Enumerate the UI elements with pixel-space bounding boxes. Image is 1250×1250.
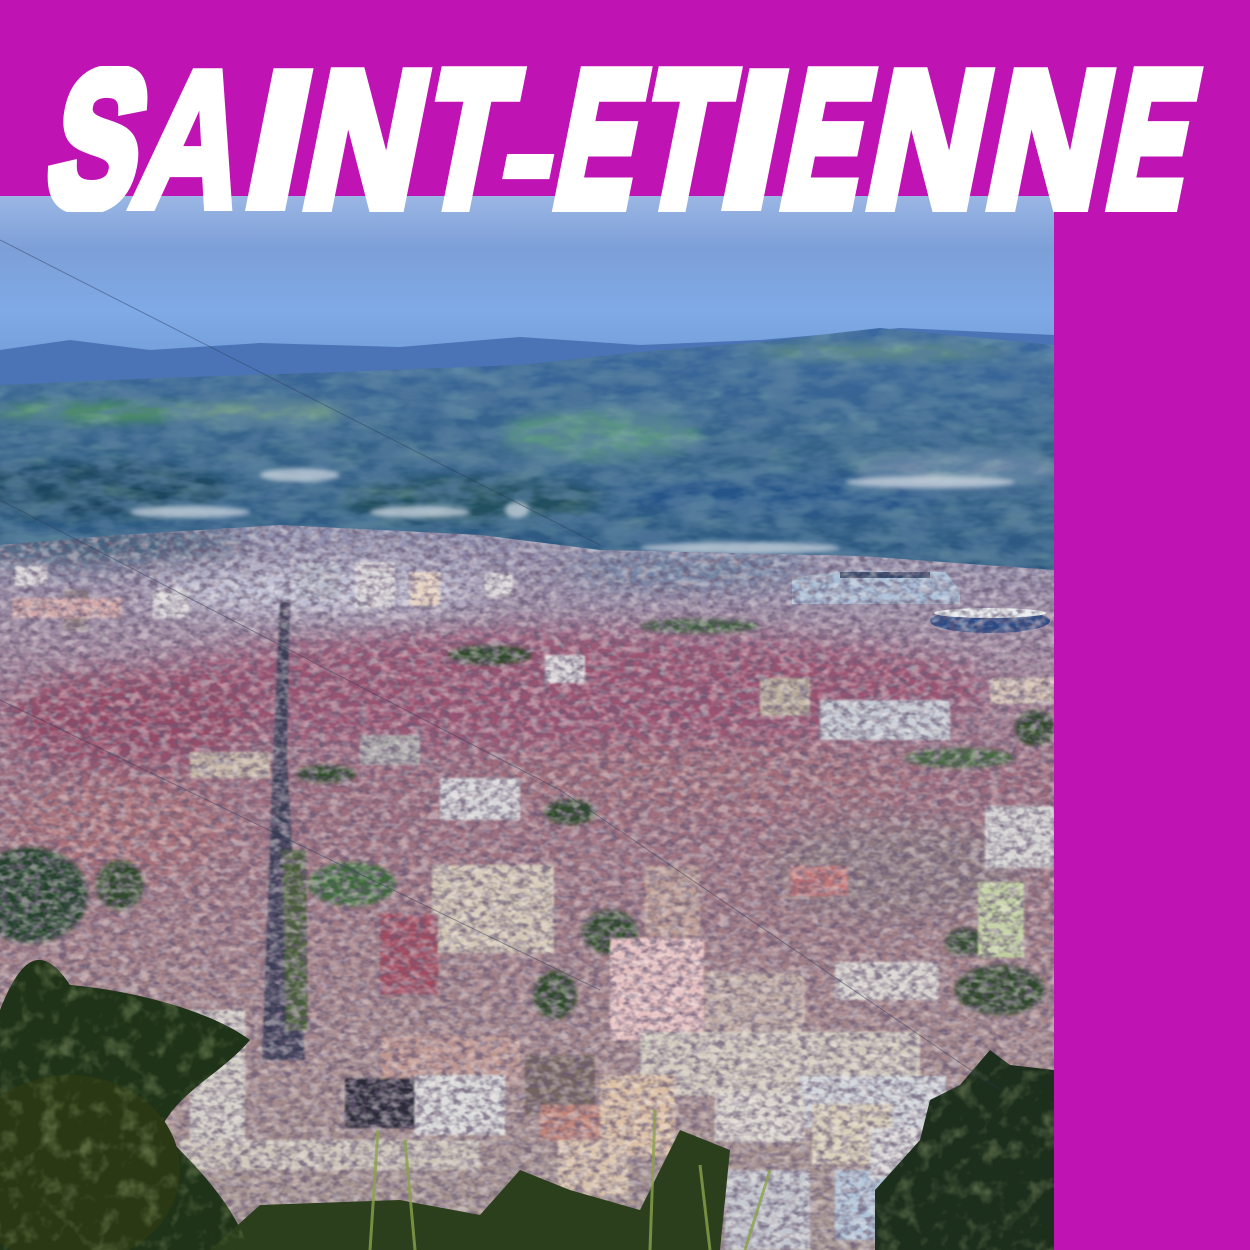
title: I: [229, 31, 329, 247]
title: E: [541, 32, 662, 248]
title: I: [705, 31, 805, 247]
cable lines: [0, 240, 1000, 1090]
distant mountains: [0, 328, 1054, 385]
stadium: [792, 570, 1050, 633]
hillside suburbs: [130, 468, 1015, 554]
right magenta column: [1054, 196, 1250, 1250]
title: N: [289, 31, 445, 247]
tall buildings on the skyline: [12, 562, 1054, 820]
title: S: [34, 33, 164, 248]
title: N: [972, 31, 1130, 247]
title: N: [852, 31, 1008, 247]
central avenue: [262, 600, 305, 1060]
title: T: [626, 33, 746, 248]
city: [0, 520, 1055, 1250]
foreground apartment blocks: [180, 806, 1054, 1250]
building texture: facades: [0, 520, 1054, 1250]
title: E: [1094, 32, 1213, 248]
title: E: [768, 33, 888, 248]
foreground trees: [0, 940, 1054, 1250]
city greenery: [0, 619, 1055, 1019]
title: -: [489, 72, 573, 236]
top magenta band: [0, 0, 1250, 196]
title: A: [120, 32, 267, 248]
city colour masses: [0, 531, 1030, 920]
green hills: [0, 320, 1060, 580]
title: [48, 66, 1204, 212]
city base: [0, 520, 1054, 1250]
title: T: [409, 32, 531, 248]
photo: aerial view of the city: [0, 196, 1060, 1250]
sky: [0, 196, 1054, 350]
building texture: shadows: [0, 520, 1054, 1250]
foreground grass stems: [370, 1110, 770, 1250]
